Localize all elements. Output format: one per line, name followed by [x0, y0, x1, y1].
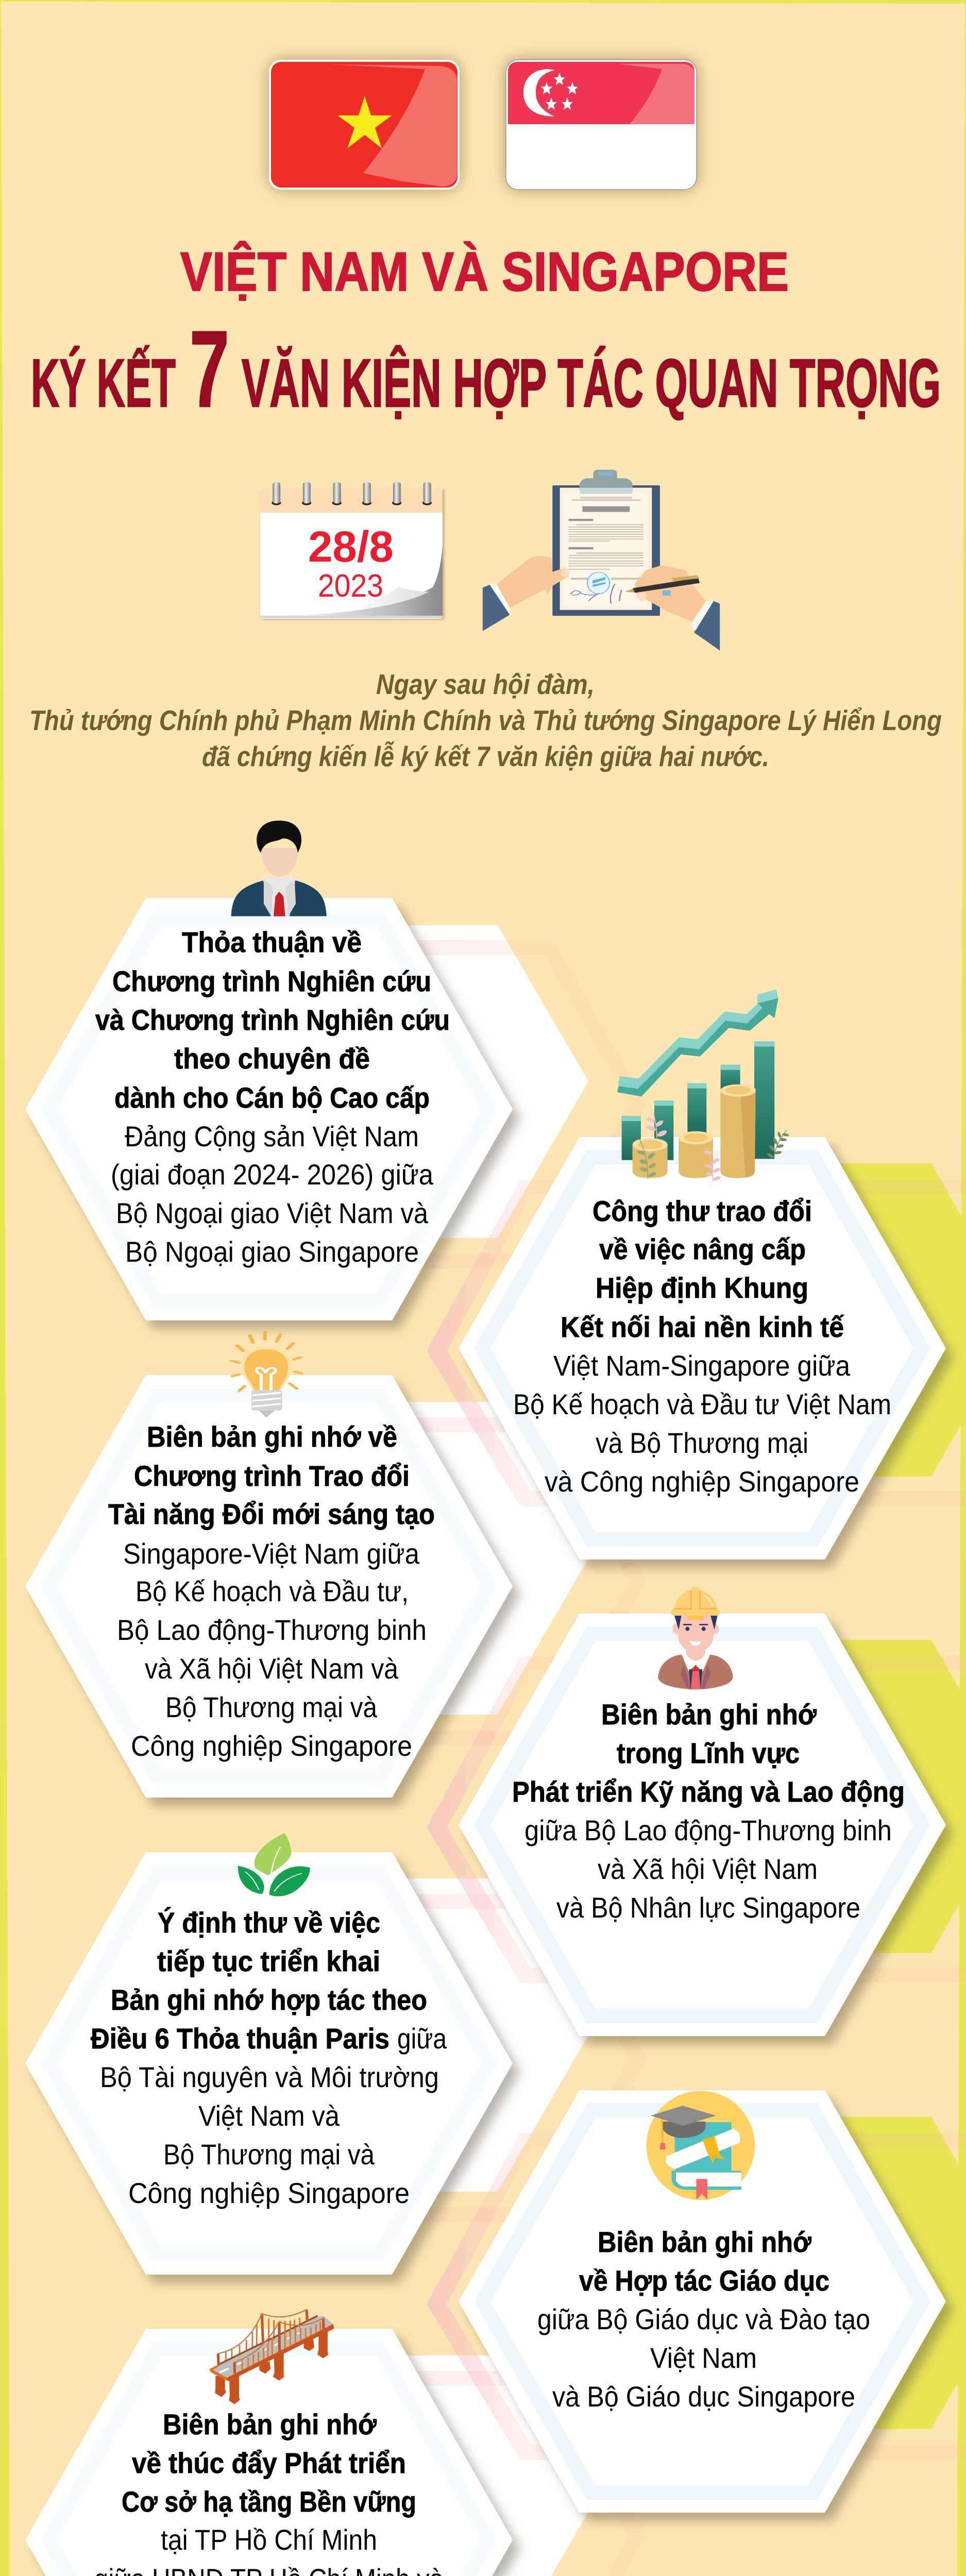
background white hexagons left	[309, 925, 588, 2576]
panel: document 5	[459, 990, 946, 1560]
flag: Vietnam	[269, 60, 460, 190]
icon: light bulb	[231, 1331, 301, 1418]
panel: document 1	[25, 821, 513, 1320]
text: Thỏa thuận về	[182, 926, 362, 958]
text: giữa Bộ Giáo dục và Đào tạo	[537, 2303, 870, 2335]
title line 2: KÝ KẾT	[31, 345, 176, 421]
text	[513, 1195, 891, 1498]
text: Kết nối hai nền kinh tế	[561, 1311, 844, 1343]
icon: person	[231, 821, 327, 916]
text: Biên bản ghi nhớ	[601, 1698, 817, 1731]
text: Công nghiệp Singapore	[128, 2177, 410, 2209]
title line 2	[31, 308, 941, 430]
icon: signing clipboard	[483, 470, 720, 651]
text: Ý định thư về việc	[158, 1906, 380, 1939]
text: Chương trình Trao đổi	[134, 1460, 410, 1492]
text: Tài năng Đổi mới sáng tạo	[108, 1498, 435, 1530]
calendar date: 28/8	[308, 522, 394, 571]
text: giữa	[397, 2022, 447, 2055]
title line 2: 7	[190, 308, 229, 430]
text	[537, 2226, 870, 2413]
text: dành cho Cán bộ Cao cấp	[114, 1081, 430, 1114]
text: Bộ Thương mại và	[165, 1691, 378, 1723]
text: Cơ sở hạ tầng Bền vững	[122, 2485, 416, 2518]
calendar year: 2023	[318, 568, 383, 604]
text: Biên bản ghi nhớ	[163, 2408, 377, 2441]
text: và Bộ Giáo dục Singapore	[552, 2380, 855, 2413]
text: về Hợp tác Giáo dục	[579, 2264, 829, 2297]
text: và Xã hội Việt Nam và	[145, 1652, 399, 1685]
background rings left	[309, 940, 647, 2576]
text: Biên bản ghi nhớ về	[147, 1420, 397, 1453]
text: Bộ Ngoại giao Việt Nam và	[116, 1197, 429, 1229]
text: tại TP Hồ Chí Minh	[161, 2523, 377, 2556]
text: tiếp tục triển khai	[157, 1945, 380, 1977]
text	[108, 1420, 435, 1762]
text: Chương trình Nghiên cứu	[112, 965, 431, 997]
icon: calendar	[260, 482, 443, 619]
text: Bản ghi nhớ hợp tác theo	[111, 1984, 427, 2016]
flag: Singapore	[506, 60, 697, 190]
text: Việt Nam-Singapore giữa	[553, 1349, 851, 1382]
text: về việc nâng cấp	[599, 1233, 806, 1265]
text: trong Lĩnh vực	[617, 1737, 800, 1769]
text: Công nghiệp Singapore	[131, 1730, 412, 1762]
text: và Công nghiệp Singapore	[545, 1465, 859, 1498]
icon: worker	[658, 1587, 733, 1689]
panel: document 2	[25, 1331, 513, 1798]
text: Hiệp định Khung	[596, 1272, 808, 1304]
icon: bridge	[210, 2310, 334, 2404]
text: Biên bản ghi nhớ	[598, 2226, 811, 2258]
text: và Bộ Thương mại	[596, 1427, 808, 1459]
text: (giai đoạn 2024- 2026) giữa	[111, 1158, 434, 1191]
text: Bộ Kế hoạch và Đầu tư,	[135, 1575, 409, 1607]
text: và Chương trình Nghiên cứu	[95, 1004, 450, 1036]
text	[512, 1698, 905, 1924]
text: Bộ Tài nguyên và Môi trường	[100, 2061, 439, 2093]
text: giữa Bộ Lao động-Thương binh	[524, 1814, 892, 1846]
panel: document 3	[25, 1833, 513, 2275]
text: Đảng Cộng sản Việt Nam	[125, 1120, 419, 1153]
text: và Xã hội Việt Nam	[598, 1853, 818, 1885]
icon: leaves	[238, 1833, 310, 1896]
title line 1: VIỆT NAM VÀ SINGAPORE	[180, 241, 789, 302]
text: và Bộ Nhân lực Singapore	[556, 1891, 860, 1924]
text: Bộ Ngoại giao Singapore	[125, 1235, 419, 1268]
text: theo chuyên đề	[174, 1042, 370, 1075]
text: Phát triển Kỹ năng và Lao động	[512, 1775, 905, 1808]
background shapes right	[721, 1163, 966, 2429]
text: Điều 6 Thỏa thuận Paris	[91, 2022, 389, 2055]
text: Công thư trao đổi	[592, 1195, 812, 1227]
intro text	[29, 668, 942, 772]
text: Bộ Kế hoạch và Đầu tư Việt Nam	[513, 1388, 891, 1420]
icon: growth chart and coins	[617, 990, 789, 1181]
background rings right	[427, 1180, 966, 2460]
text	[94, 2408, 444, 2576]
text: Bộ Lao động-Thương binh	[117, 1614, 427, 1646]
text: Việt Nam và	[198, 2099, 340, 2132]
intro text: đã chứng kiến lễ ký kết 7 văn kiện giữa hai nước.	[202, 740, 769, 772]
panel: document 4	[25, 2310, 513, 2576]
text	[95, 926, 450, 1268]
text: về thúc đẩy Phát triển	[132, 2447, 406, 2479]
text: Việt Nam	[650, 2342, 757, 2374]
intro text: Ngay sau hội đàm,	[376, 668, 595, 700]
text: Bộ Thương mại và	[163, 2138, 375, 2171]
icon: graduation books	[647, 2091, 755, 2200]
text: Singapore-Việt Nam giữa	[123, 1537, 420, 1570]
panel: document 7	[459, 2090, 946, 2513]
text	[91, 1906, 447, 2209]
panel: document 6	[459, 1587, 946, 2036]
